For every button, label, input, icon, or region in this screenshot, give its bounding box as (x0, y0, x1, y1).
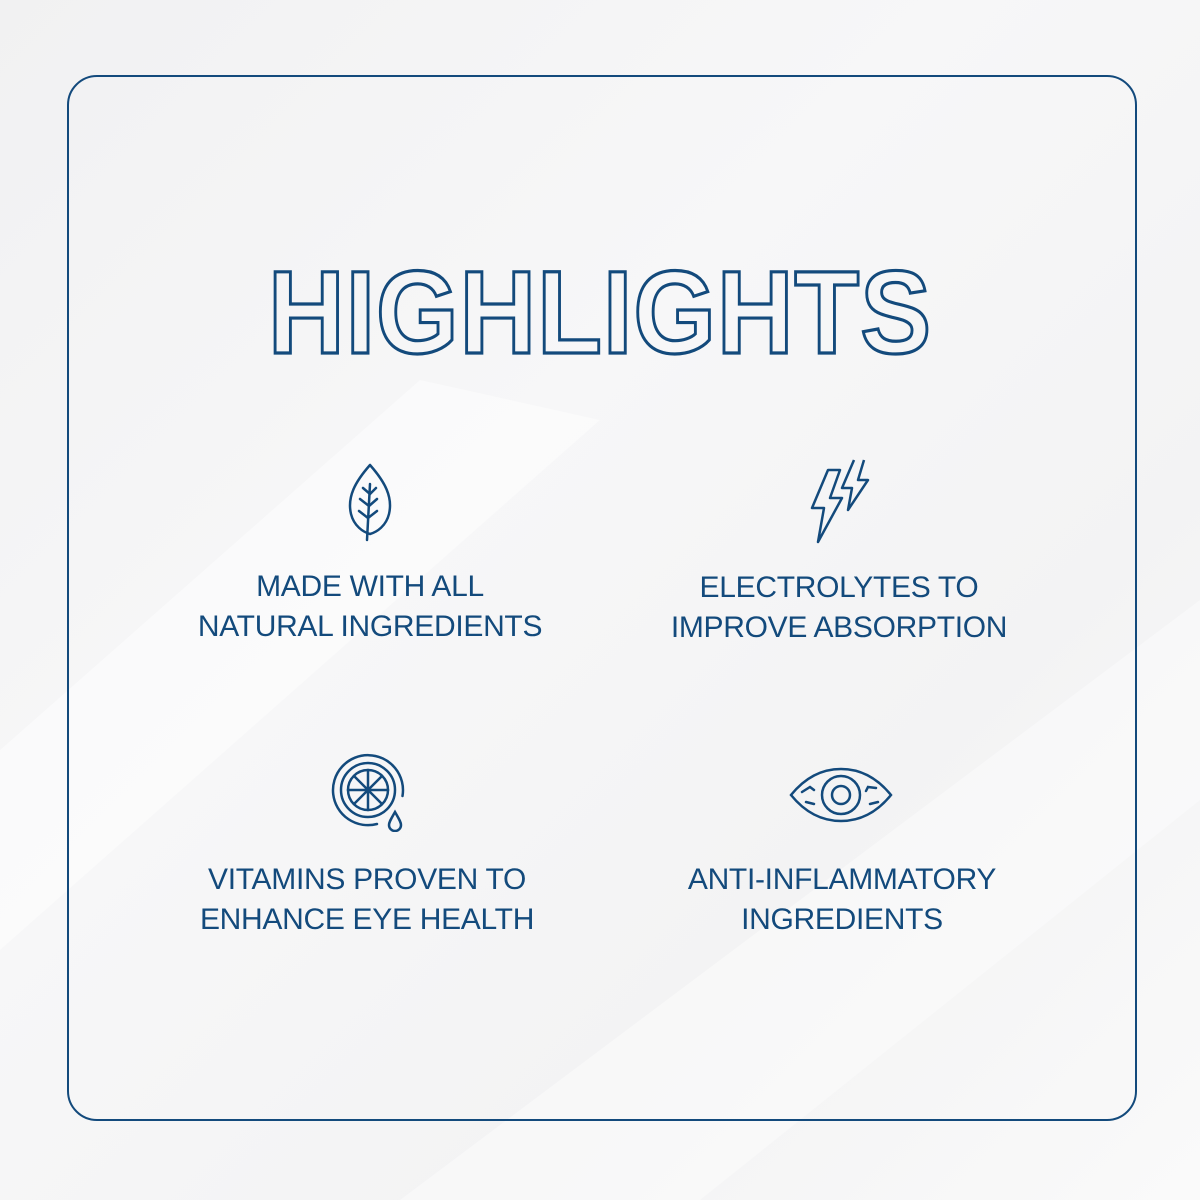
text: vitamins: ENHANCE EYE HEALTH (200, 903, 534, 936)
text: anti-inflammatory: ANTI-INFLAMMATORY (688, 863, 996, 896)
text: natural ingredients: MADE WITH ALL (256, 570, 484, 603)
text: electrolytes (671, 571, 1007, 644)
text: natural ingredients (198, 570, 542, 643)
text: vitamins (200, 863, 534, 936)
text: natural ingredients: NATURAL INGREDIENTS (198, 610, 542, 643)
icon: lightning (810, 460, 870, 544)
icon: leaf (348, 464, 392, 542)
icon: citrus with drop (332, 754, 404, 832)
icon: eye (790, 768, 892, 822)
text: anti-inflammatory (688, 863, 996, 936)
panel: highlights frame (67, 75, 1137, 1121)
text: electrolytes: ELECTROLYTES TO (700, 571, 978, 604)
text: anti-inflammatory: INGREDIENTS (741, 903, 943, 936)
text: vitamins: VITAMINS PROVEN TO (208, 863, 526, 896)
text: electrolytes: IMPROVE ABSORPTION (671, 611, 1007, 644)
